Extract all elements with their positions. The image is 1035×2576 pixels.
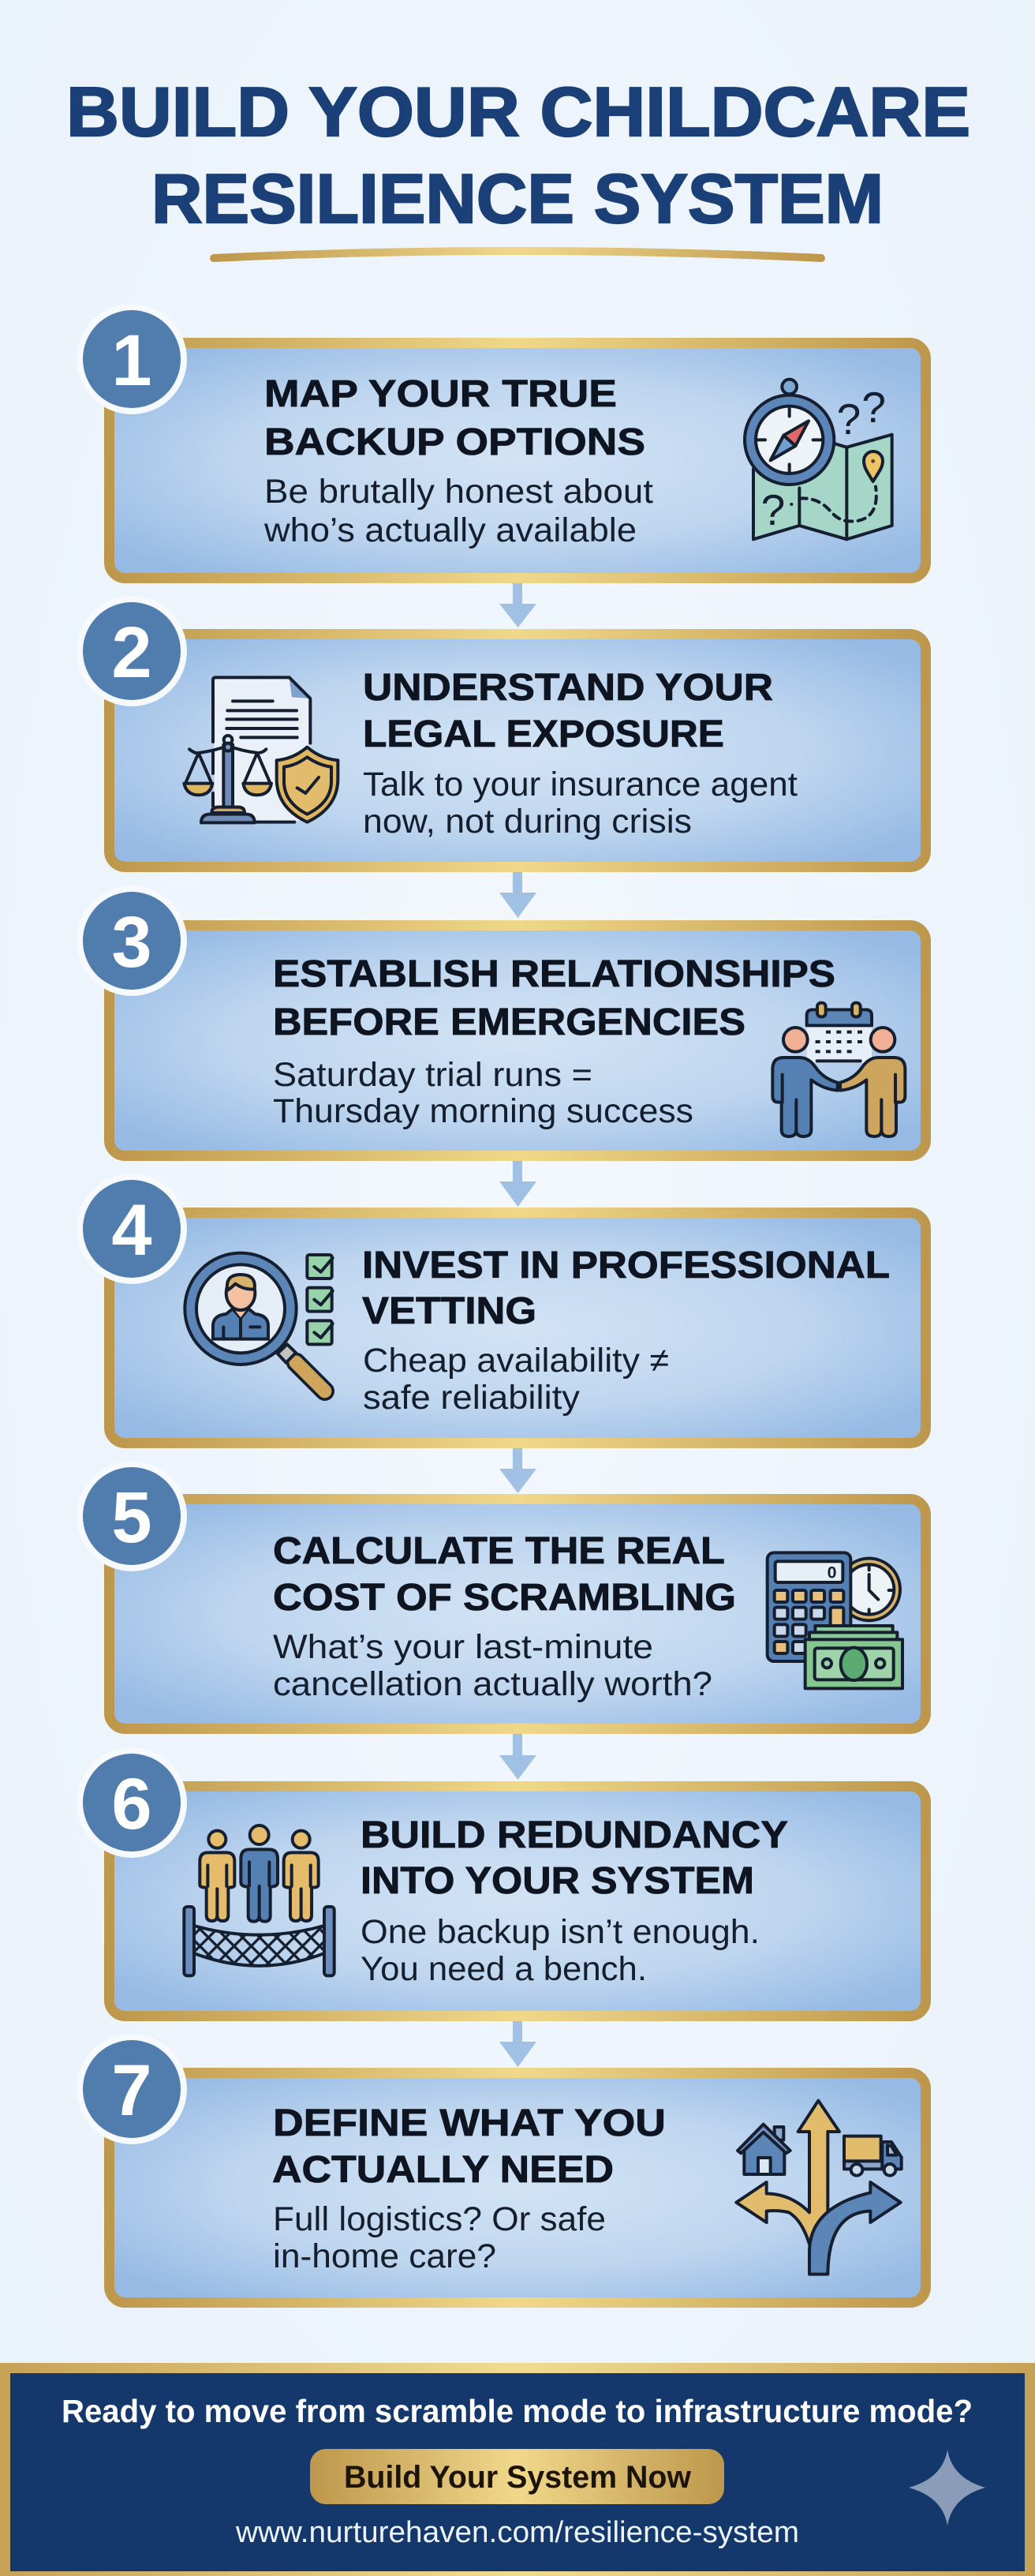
icon: magnifier with person and checklist: [185, 1253, 333, 1391]
icon: compass and map: ?: [861, 383, 886, 432]
icon: diverging arrows with house and truck: [736, 2101, 902, 2275]
heading: BEFORE EMERGENCIES: [273, 1002, 745, 1043]
panel: step 1: [77, 304, 926, 578]
panel: step 4: [77, 1174, 926, 1443]
number badge 1: 1: [111, 320, 152, 401]
heading: [264, 373, 645, 463]
description: Thursday morning success: [273, 1092, 693, 1130]
heading: DEFINE WHAT YOU: [273, 2102, 666, 2144]
description: [363, 766, 798, 841]
icon: calculator, clock and money: 0: [828, 1563, 837, 1582]
description: [263, 473, 653, 549]
icon: compass and map: ?: [837, 395, 861, 444]
arrow: step 3 to 4: [499, 1161, 536, 1207]
arrow: step 4 to 5: [499, 1448, 536, 1493]
heading: VETTING: [362, 1290, 536, 1332]
heading: [361, 1814, 788, 1902]
description: You need a bench.: [361, 1950, 647, 1988]
description: cancellation actually worth?: [273, 1665, 712, 1703]
heading: LEGAL EXPOSURE: [363, 713, 724, 755]
panel: step 2: [77, 596, 926, 867]
description: safe reliability: [363, 1379, 581, 1417]
button: [310, 2449, 724, 2504]
number badge 5: [77, 1461, 187, 1571]
icon: handshake and calendar: [772, 1003, 905, 1136]
number badge 7: [77, 2034, 187, 2144]
panel: step 6: [77, 1747, 926, 2016]
heading: INVEST IN PROFESSIONAL: [362, 1245, 890, 1286]
icon: calculator, clock and money: [768, 1552, 902, 1688]
number badge 2: [77, 596, 187, 706]
footer background: [10, 2373, 1025, 2571]
description: [273, 1056, 693, 1130]
description: [361, 1913, 760, 1988]
panel: step 5: [77, 1461, 926, 1728]
description: One backup isn’t enough.: [361, 1913, 760, 1951]
description: [363, 1342, 669, 1417]
arrow: step 6 to 7: [499, 2021, 536, 2067]
heading: BUILD REDUNDANCY: [361, 1814, 788, 1856]
number badge 2: 2: [111, 612, 152, 693]
button: Build Your System Now: [344, 2460, 692, 2495]
description: Saturday trial runs =: [273, 1056, 592, 1094]
title: RESILIENCE SYSTEM: [151, 159, 884, 238]
heading: CALCULATE THE REAL: [273, 1530, 725, 1572]
panel: step 7: [77, 2034, 926, 2303]
card frame: [109, 1787, 926, 2016]
icon: compass and map: ?: [761, 485, 785, 534]
description: Talk to your insurance agent: [363, 766, 798, 803]
card frame: [109, 925, 926, 1155]
description: who’s actually available: [263, 511, 637, 549]
card frame: [109, 635, 926, 867]
arrow: step 1 to 2: [499, 583, 536, 627]
heading: ACTUALLY NEED: [272, 2149, 614, 2191]
title underline: [214, 251, 821, 258]
description: Full logistics? Or safe: [273, 2200, 606, 2238]
number badge 6: 6: [111, 1764, 152, 1844]
description: Cheap availability ≠: [363, 1342, 669, 1380]
heading: [273, 953, 835, 1043]
heading: MAP YOUR TRUE: [264, 373, 617, 415]
card frame: [109, 1212, 926, 1443]
description: [273, 1628, 712, 1703]
description: Be brutally honest about: [264, 473, 653, 511]
heading: BACKUP OPTIONS: [264, 421, 645, 463]
title: BUILD YOUR CHILDCARE: [66, 73, 970, 151]
title: [66, 73, 970, 238]
heading: UNDERSTAND YOUR: [363, 667, 773, 709]
number badge 5: 5: [111, 1477, 152, 1558]
icon: compass and map: [745, 380, 892, 539]
arrow: step 5 to 6: [499, 1734, 536, 1780]
arrow: step 2 to 3: [499, 872, 536, 918]
number badge 1: [77, 304, 187, 414]
heading: COST OF SCRAMBLING: [273, 1577, 736, 1619]
heading: INTO YOUR SYSTEM: [361, 1860, 754, 1902]
heading: [273, 1530, 736, 1619]
card frame: [109, 343, 926, 578]
description: now, not during crisis: [363, 803, 692, 841]
footer frame: [0, 2363, 1035, 2576]
icon: sparkle: [909, 2450, 985, 2525]
icon: team above safety net: [184, 1825, 334, 1975]
number badge 3: 3: [111, 902, 152, 983]
heading: [272, 2102, 666, 2191]
number badge 6: [77, 1747, 187, 1858]
card frame: [109, 1500, 926, 1728]
heading: [363, 667, 773, 755]
icon: legal document, scales and shield: [184, 677, 338, 822]
number badge 4: [77, 1174, 187, 1284]
panel: call to action footer: [0, 2363, 1035, 2576]
number badge 4: 4: [111, 1190, 152, 1271]
number badge 3: [77, 886, 187, 996]
description: in-home care?: [273, 2237, 496, 2275]
heading: [362, 1245, 890, 1332]
number badge 7: 7: [111, 2050, 152, 2131]
panel: step 3: [77, 886, 926, 1155]
website url: www.nurturehaven.com/resilience-system: [235, 2516, 799, 2549]
description: What’s your last-minute: [273, 1628, 653, 1666]
description: [273, 2200, 606, 2275]
heading: ESTABLISH RELATIONSHIPS: [273, 953, 835, 995]
card frame: [109, 2072, 926, 2303]
call to action headline: Ready to move from scramble mode to infrastructure mode?: [62, 2393, 973, 2429]
